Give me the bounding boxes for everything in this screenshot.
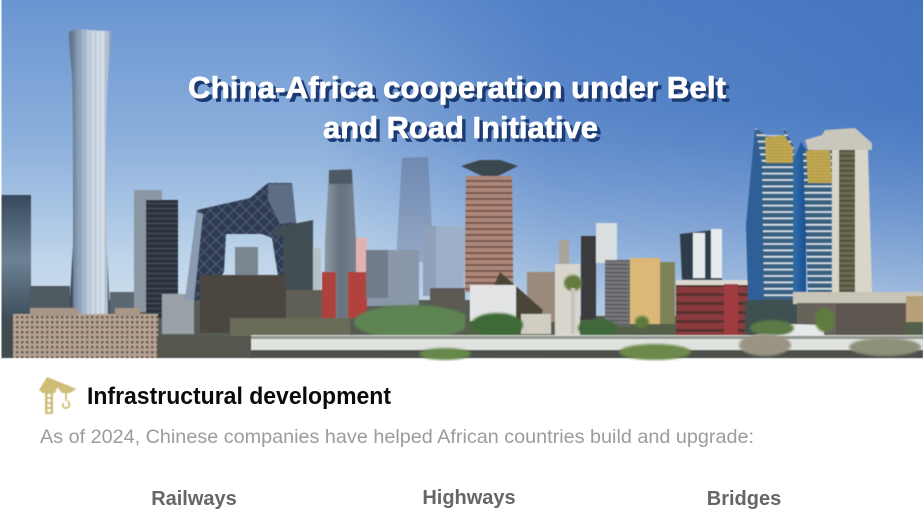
- title: and Road Initiative: [323, 110, 598, 145]
- heading: Infrastructural development: Infrastructural development: [87, 383, 391, 410]
- icon: crane: [39, 377, 77, 414]
- Beijing skyline: [0, 29, 470, 358]
- palms and trees: [471, 313, 523, 337]
- label: Railways: Railways: [151, 488, 237, 510]
- title: [188, 70, 726, 145]
- apartments: [13, 314, 158, 358]
- hero: skyline photo: [0, 0, 923, 360]
- label: Bridges: Bridges: [707, 488, 781, 510]
- title: China-Africa cooperation under Belt: [188, 70, 726, 105]
- label: Highways: Highways: [422, 487, 516, 509]
- twin towers: [746, 128, 768, 300]
- trees: [354, 305, 470, 339]
- text: intro sentence: As of 2024, Chinese companies have helped African countries build and upgrade:: [40, 426, 754, 448]
- elevated highway: [251, 334, 923, 360]
- Nairobi skyline: [461, 128, 923, 340]
